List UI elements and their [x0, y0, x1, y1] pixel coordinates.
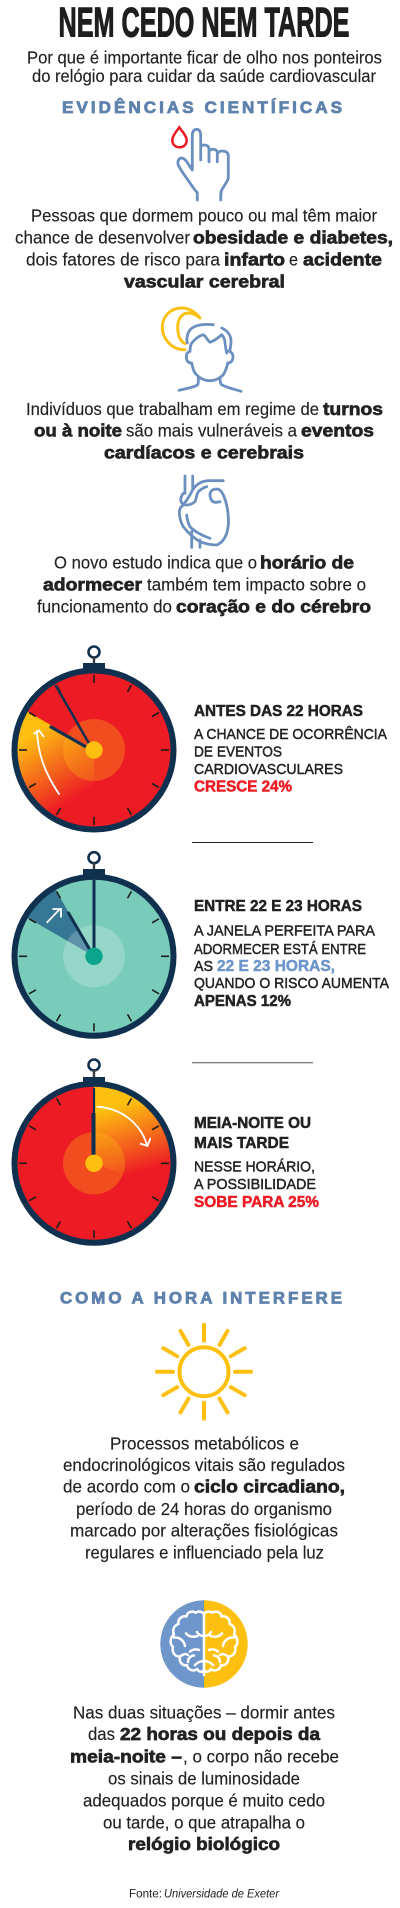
clock: entre 22 e 23 horas: [14, 852, 174, 1036]
text block: ciclo circadiano: Processos metabólicos e: [110, 1433, 299, 1453]
text: antes das 22 horas: CRESCE 24%: [194, 779, 292, 796]
text block: relógio biológico: relógio biológico: [128, 1834, 280, 1854]
text block: horário de adormecer: coração e do cérebro: [176, 597, 371, 617]
subtitle: [27, 47, 382, 86]
text block: ciclo circadiano: [63, 1433, 345, 1563]
text block: turnos: turnos: [323, 399, 383, 419]
text block: ciclo circadiano: regulares e influenciado pela luz: [85, 1543, 324, 1563]
text: meia-noite ou mais tarde: [194, 1115, 319, 1211]
clock: antes das 22 horas: [14, 646, 174, 830]
text block: relógio biológico: meia-noite –: [70, 1746, 182, 1766]
text block: ciclo circadiano: de acordo com o: [63, 1477, 190, 1497]
text: meia-noite ou mais tarde: MAIS TARDE: [194, 1135, 289, 1152]
text block: sono: acidente: [303, 250, 382, 270]
icon: sun: [157, 1325, 251, 1419]
icon: heart: [179, 476, 228, 547]
text block: sono: chance de desenvolver: [15, 228, 190, 248]
text block: relógio biológico: os sinais de luminosidade: [108, 1768, 300, 1788]
text: entre 22 e 23 horas: AS: [194, 958, 213, 975]
text block: ciclo circadiano: ciclo circadiano,: [194, 1477, 345, 1497]
heading: evidências científicas: EVIDÊNCIAS CIENTÍFICAS: [62, 98, 345, 117]
text block: horário de adormecer: adormecer: [43, 575, 142, 595]
subtitle: do relógio para cuidar da saúde cardiovascular: [32, 66, 376, 86]
text: entre 22 e 23 horas: A JANELA PERFEITA PARA: [194, 923, 375, 940]
text block: relógio biológico: adequados porque é muito cedo: [83, 1791, 325, 1811]
text: antes das 22 horas: A CHANCE DE OCORRÊNCIA: [194, 726, 387, 743]
text: entre 22 e 23 horas: QUANDO O RISCO AUMENTA: [194, 975, 389, 992]
text block: sono: [15, 206, 393, 292]
text block: turnos: [26, 399, 383, 462]
text: meia-noite ou mais tarde: A POSSIBILIDADE: [194, 1176, 316, 1193]
subtitle: Por que é importante ficar de olho nos ponteiros: [27, 47, 382, 67]
text: meia-noite ou mais tarde: SOBE PARA 25%: [194, 1194, 319, 1211]
text: antes das 22 horas: [194, 703, 387, 796]
text block: relógio biológico: [70, 1702, 339, 1854]
text block: horário de adormecer: O novo estudo indica que o: [54, 552, 257, 572]
text block: turnos: eventos: [301, 421, 374, 441]
text block: sono: infarto: [224, 250, 285, 270]
text block: sono: e: [289, 250, 298, 270]
text: antes das 22 horas: CARDIOVASCULARES: [194, 761, 343, 778]
text block: sono: dois fatores de risco para: [26, 250, 220, 270]
text: meia-noite ou mais tarde: NESSE HORÁRIO,: [194, 1159, 315, 1176]
icon: head with moon: [162, 308, 241, 391]
text: entre 22 e 23 horas: 22 E 23 HORAS,: [217, 958, 335, 975]
text block: relógio biológico: ou tarde, o que atrapalha o: [103, 1812, 305, 1832]
text block: relógio biológico: Nas duas situações – dormir antes: [73, 1702, 335, 1722]
source: Fonte:: [129, 1887, 162, 1901]
text: entre 22 e 23 horas: [194, 898, 389, 1010]
text block: turnos: cardíacos e cerebrais: [104, 442, 304, 462]
text: meia-noite ou mais tarde: MEIA-NOITE OU: [194, 1115, 311, 1132]
text block: ciclo circadiano: endocrinológicos vitais são regulados: [63, 1455, 345, 1475]
text block: turnos: ou à noite: [34, 421, 122, 441]
text block: relógio biológico: 22 horas ou depois da: [120, 1724, 320, 1744]
icon: finger with blood drop: [172, 127, 228, 200]
text block: sono: obesidade e diabetes,: [193, 228, 393, 248]
text: antes das 22 horas: DE EVENTOS: [194, 744, 282, 760]
text block: ciclo circadiano: período de 24 horas do organismo: [76, 1499, 332, 1519]
text block: turnos: Indivíduos que trabalham em regime de: [26, 399, 319, 419]
text block: horário de adormecer: horário de: [260, 552, 354, 572]
text block: horário de adormecer: também tem impacto sobre o: [147, 575, 366, 595]
text block: horário de adormecer: funcionamento do: [37, 597, 172, 617]
icon: brain: [160, 1600, 248, 1688]
heading: como a hora interfere: COMO A HORA INTERFERE: [60, 1288, 345, 1307]
text: entre 22 e 23 horas: ADORMECER ESTÁ ENTRE: [194, 941, 366, 958]
text block: relógio biológico: , o corpo não recebe: [183, 1746, 339, 1766]
text: antes das 22 horas: ANTES DAS 22 HORAS: [194, 703, 363, 720]
text: entre 22 e 23 horas: APENAS 12%: [194, 993, 291, 1010]
source: Universidade de Exeter: [164, 1887, 280, 1901]
clock: meia-noite ou mais tarde: [14, 1060, 174, 1243]
text block: horário de adormecer: [37, 552, 371, 617]
text block: relógio biológico: das: [88, 1724, 115, 1744]
text block: ciclo circadiano: marcado por alterações fisiológicas: [70, 1521, 338, 1541]
text block: sono: vascular cerebral: [124, 272, 285, 292]
text block: sono: Pessoas que dormem pouco ou mal têm maior: [31, 206, 377, 226]
text: entre 22 e 23 horas: ENTRE 22 E 23 HORAS: [194, 898, 362, 915]
text block: turnos: são mais vulneráveis a: [126, 421, 297, 441]
